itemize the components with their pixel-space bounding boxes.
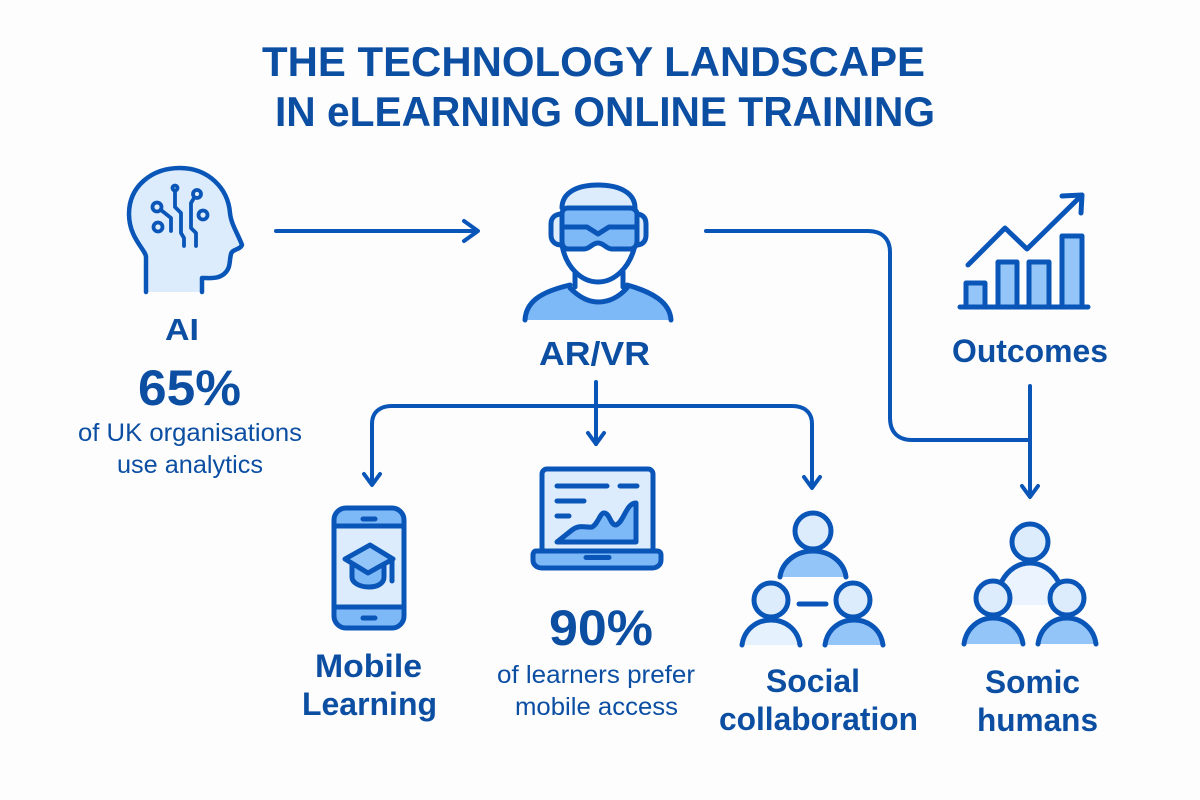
icon: laptop with chart [533, 469, 661, 568]
text: AI statistic [78, 312, 302, 479]
icon: Somic humans group [964, 524, 1096, 644]
title [262, 38, 935, 135]
label: Social collaboration [719, 663, 918, 737]
title: IN eLEARNING ONLINE TRAINING [275, 88, 935, 135]
text: AI statistic: of UK organisations [78, 419, 302, 447]
label: AR/VR: AR/VR [539, 335, 650, 372]
text: AI statistic: AI [165, 312, 199, 347]
connector: AR/VR to Somic humans [706, 231, 1030, 440]
icon: social collaboration group [742, 513, 883, 645]
text: 90% statistic: of learners prefer [497, 661, 695, 689]
label: Social collaboration: collaboration [719, 701, 918, 737]
text: AI statistic: 65% [138, 360, 241, 416]
label: Somic humans: Somic [985, 664, 1080, 700]
arrow: AI to AR/VR [276, 221, 478, 241]
label: Mobile Learning: Mobile [315, 648, 422, 684]
label: Mobile Learning [302, 648, 437, 722]
text: 90% statistic: mobile access [515, 693, 678, 721]
icon: AI head [129, 168, 242, 292]
label: Outcomes: Outcomes [952, 333, 1108, 369]
connector: AR/VR branches [364, 382, 820, 488]
text: 90% statistic [497, 600, 695, 721]
arrow: Outcomes to Somic humans [1022, 386, 1038, 497]
icon: Outcomes chart [960, 195, 1088, 307]
title: THE TECHNOLOGY LANDSCAPE [262, 38, 925, 85]
text: 90% statistic: 90% [549, 600, 653, 656]
label: Somic humans: humans [977, 702, 1098, 738]
label: Social collaboration: Social [766, 663, 860, 699]
text: AI statistic: use analytics [117, 451, 263, 479]
label: Somic humans [977, 664, 1098, 738]
icon: mobile learning phone [334, 508, 404, 628]
label: Mobile Learning: Learning [302, 686, 437, 722]
icon: AR/VR headset person [525, 185, 671, 320]
